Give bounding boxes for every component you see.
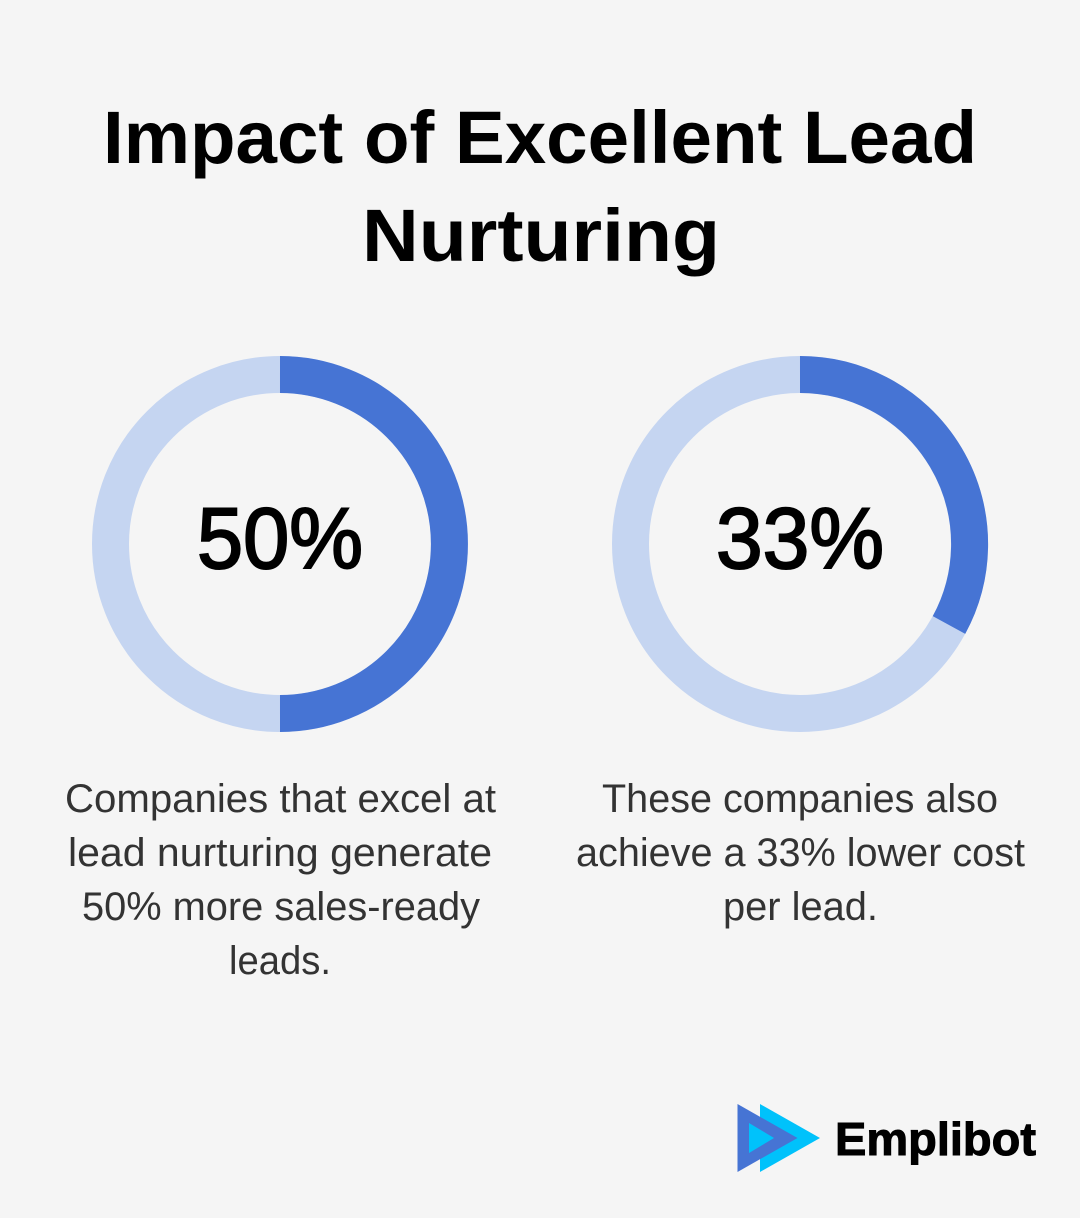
- donut chart: 33%: [630, 374, 970, 714]
- title: [103, 96, 977, 277]
- donut chart: 50%: 50%: [197, 491, 363, 587]
- text block: 50% description: leads.: [229, 939, 331, 983]
- icon: play triangles: [738, 1104, 820, 1172]
- title: Nurturing: [362, 194, 720, 277]
- donut chart: 50%: [110, 374, 450, 714]
- text block: 50% description: lead nurturing generate: [68, 831, 492, 875]
- text block: 50% description: 50% more sales-ready: [82, 885, 480, 929]
- donut chart: 33%: 33%: [716, 491, 884, 587]
- title: Impact of Excellent Lead: [103, 96, 977, 179]
- text block: 33% description: These companies also: [602, 777, 998, 821]
- text block: 33% description: per lead.: [723, 885, 878, 929]
- logo: Emplibot: [738, 1104, 1036, 1172]
- text block: 50% description: Companies that excel at: [65, 777, 496, 821]
- text block: 33% description: [576, 777, 1025, 929]
- text block: 33% description: achieve a 33% lower cost: [576, 831, 1025, 875]
- text block: 50% description: [65, 777, 496, 983]
- wordmark: Emplibot: [835, 1113, 1036, 1165]
